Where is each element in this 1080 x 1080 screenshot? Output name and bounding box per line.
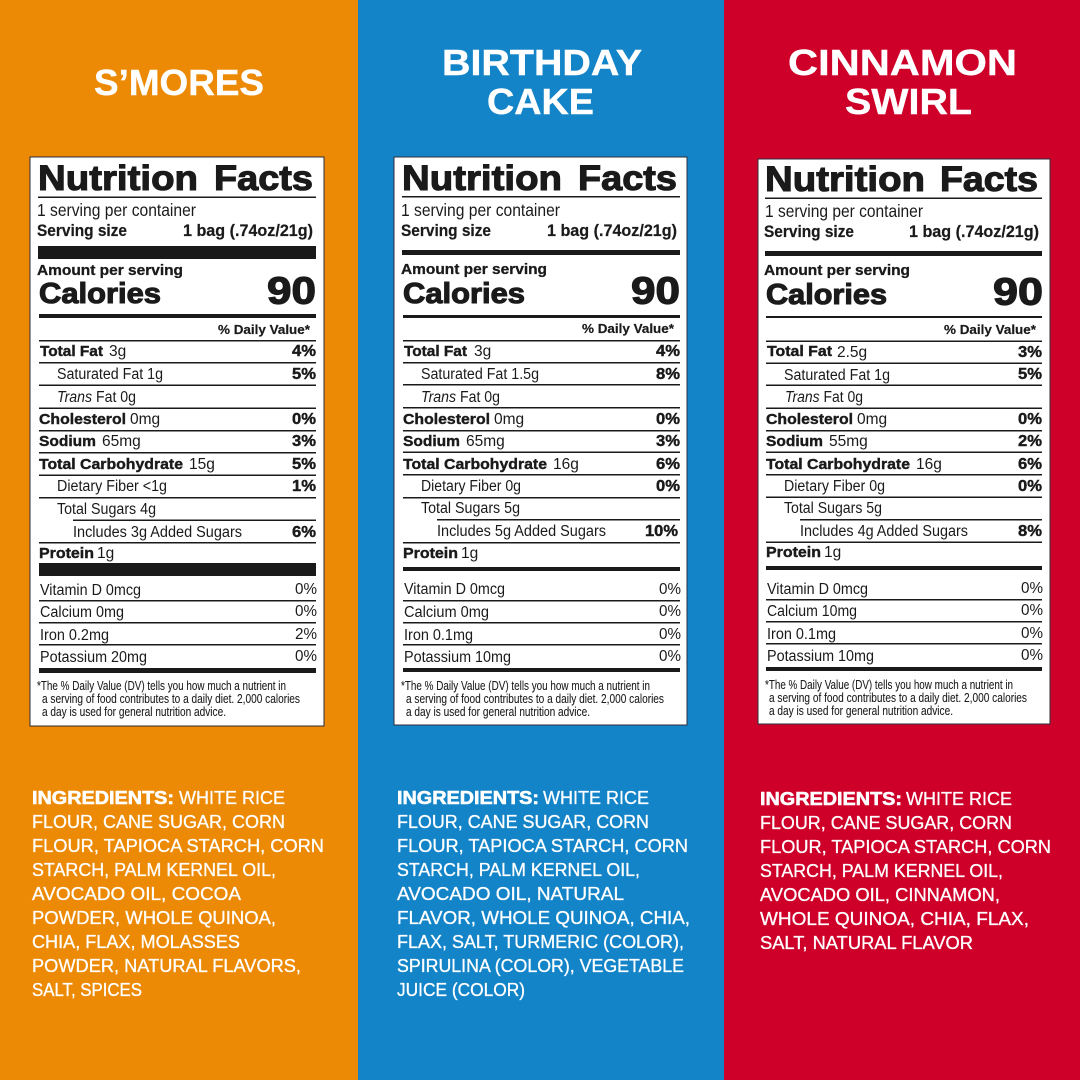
nutrition label: s'mores: Nutrition: [38, 158, 198, 198]
nutrition label: birthday cake: Calories: [403, 278, 525, 310]
nutrition label: cinnamon swirl: 1g: [824, 544, 841, 561]
nutrition label: s'mores: 0%: [295, 603, 317, 620]
nutrition label: cinnamon swirl: Includes 4g Added Sugars: [800, 523, 968, 540]
nutrition label: birthday cake: 4%: [656, 343, 680, 360]
nutrition label: s'mores: 5%: [292, 366, 316, 383]
nutrition label: cinnamon swirl: 8%: [1018, 523, 1042, 540]
nutrition label: cinnamon swirl: 0%: [1021, 580, 1043, 597]
nutrition label: cinnamon swirl: % Daily Value*: [944, 322, 1037, 337]
nutrition label: cinnamon swirl: Total Fat: [767, 343, 832, 360]
nutrition label: birthday cake: Includes 5g Added Sugars: [437, 523, 606, 540]
ingredients: cinnamon swirl: FLOUR, TAPIOCA STARCH, CORN: [760, 836, 1051, 857]
nutrition label: birthday cake: Calcium 0mg: [404, 604, 489, 621]
ingredients: s'mores: POWDER, WHOLE QUINOA,: [32, 907, 276, 928]
nutrition label: s'mores: Saturated Fat 1g: [57, 366, 163, 383]
heading: cinnamon swirl: [788, 42, 1017, 122]
ingredients: s'mores: AVOCADO OIL, COCOA: [32, 883, 242, 904]
ingredients: birthday cake: INGREDIENTS:: [397, 787, 539, 808]
nutrition label: birthday cake: 0%: [656, 411, 680, 428]
nutrition label: cinnamon swirl: Total Carbohydrate: [766, 456, 910, 473]
ingredients: birthday cake: WHITE RICE: [543, 787, 649, 808]
nutrition label: birthday cake: Sodium: [403, 433, 460, 450]
heading: birthday cake: [442, 42, 642, 122]
nutrition label: birthday cake: 1g: [461, 545, 478, 562]
nutrition label: s'mores: Calcium 0mg: [40, 604, 124, 621]
ingredients: birthday cake: FLAVOR, WHOLE QUINOA, CHIA,: [397, 907, 690, 928]
nutrition label: s'mores: Facts: [214, 158, 313, 198]
ingredients: birthday cake: SPIRULINA (COLOR), VEGETABLE: [397, 955, 684, 976]
nutrition label: s'mores: 3g: [109, 343, 126, 360]
nutrition label: s'mores: 6%: [292, 524, 316, 541]
nutrition label: cinnamon swirl: 6%: [1018, 456, 1042, 473]
nutrition label: cinnamon swirl: Nutrition: [765, 159, 925, 199]
nutrition label: cinnamon swirl: 5%: [1018, 366, 1042, 383]
nutrition label: s'mores: 90: [267, 270, 316, 312]
nutrition label: s'mores: [30, 157, 324, 726]
nutrition label: cinnamon swirl: Sodium: [766, 433, 823, 450]
nutrition label: cinnamon swirl: 0mg: [857, 411, 887, 428]
nutrition label: birthday cake: 0%: [659, 603, 681, 620]
ingredients: birthday cake: FLAX, SALT, TURMERIC (COLOR),: [397, 931, 684, 952]
nutrition label: cinnamon swirl: [758, 159, 1050, 724]
nutrition label: birthday cake: Nutrition: [402, 158, 562, 198]
nutrition label: s'mores: 0%: [295, 648, 317, 665]
ingredients: cinnamon swirl: WHITE RICE: [906, 788, 1012, 809]
nutrition label: s'mores: Serving size: [37, 221, 127, 240]
nutrition label: cinnamon swirl: Total Sugars 5g: [784, 500, 882, 517]
ingredients: cinnamon swirl: SALT, NATURAL FLAVOR: [760, 932, 973, 953]
ingredients: s'mores: WHITE RICE: [179, 787, 285, 808]
nutrition label: birthday cake: Protein: [403, 545, 458, 562]
heading: birthday cake: CAKE: [487, 81, 594, 122]
nutrition label: s'mores: 1%: [292, 478, 316, 495]
ingredients: cinnamon swirl: STARCH, PALM KERNEL OIL,: [760, 860, 1003, 881]
nutrition label: s'mores: Total Carbohydrate: [39, 456, 183, 473]
nutrition label: birthday cake: 10%: [645, 523, 678, 540]
nutrition label: birthday cake: Amount per serving: [401, 262, 547, 278]
nutrition label: birthday cake: 6%: [656, 456, 680, 473]
nutrition label: cinnamon swirl: 2.5g: [837, 344, 867, 361]
nutrition label: cinnamon swirl: Amount per serving: [764, 263, 910, 279]
nutrition label: birthday cake: 0%: [659, 581, 681, 598]
ingredients: cinnamon swirl: WHOLE QUINOA, CHIA, FLAX,: [760, 908, 1029, 929]
nutrition label: s'mores: Cholesterol: [39, 411, 126, 428]
nutrition label: birthday cake: Saturated Fat 1.5g: [421, 366, 539, 383]
nutrition label: birthday cake: % Daily Value*: [582, 321, 675, 336]
nutrition label: s'mores: Protein: [39, 545, 94, 562]
nutrition label: s'mores: 65mg: [102, 433, 141, 450]
nutrition label: cinnamon swirl: a day is used for general nutrition advice.: [769, 704, 953, 718]
ingredients: birthday cake: JUICE (COLOR): [397, 979, 525, 1000]
nutrition label: birthday cake: 65mg: [466, 433, 505, 450]
nutrition label: s'mores: 0mg: [130, 411, 160, 428]
ingredients: birthday cake: [397, 787, 690, 1000]
nutrition label: birthday cake: Dietary Fiber 0g: [421, 478, 521, 495]
nutrition label: s'mores: 5%: [292, 456, 316, 473]
nutrition label: cinnamon swirl: Cholesterol: [766, 411, 853, 428]
nutrition label: birthday cake: a serving of food contributes to a daily diet. 2,000 calories: [406, 692, 664, 706]
nutrition label: birthday cake: 1 serving per container: [401, 200, 560, 220]
nutrition label: birthday cake: 90: [631, 270, 680, 312]
nutrition label: s'mores: 15g: [189, 456, 215, 473]
nutrition label: s'mores: Sodium: [39, 433, 96, 450]
ingredients: birthday cake: AVOCADO OIL, NATURAL: [397, 883, 624, 904]
nutrition label: cinnamon swirl: Facts: [940, 159, 1038, 199]
nutrition label: s'mores: Calories: [39, 278, 161, 310]
nutrition label: s'mores: Total Fat: [40, 343, 103, 360]
nutrition label: birthday cake: 0%: [659, 648, 681, 665]
nutrition label: birthday cake: 0%: [656, 478, 680, 495]
heading: birthday cake: BIRTHDAY: [442, 42, 642, 83]
nutrition label: birthday cake: Cholesterol: [403, 411, 490, 428]
nutrition label: s'mores: 1g: [97, 545, 114, 562]
nutrition label: s'mores: Trans Fat 0g: [57, 389, 136, 406]
ingredients: birthday cake: FLOUR, CANE SUGAR, CORN: [397, 811, 649, 832]
nutrition label: s'mores: Iron 0.2mg: [40, 627, 109, 644]
ingredients: s'mores: CHIA, FLAX, MOLASSES: [32, 931, 240, 952]
ingredients: cinnamon swirl: AVOCADO OIL, CINNAMON,: [760, 884, 1000, 905]
nutrition label: s'mores: 4%: [292, 343, 316, 360]
nutrition label: cinnamon swirl: Calories: [766, 279, 887, 311]
ingredients: s'mores: POWDER, NATURAL FLAVORS,: [32, 955, 301, 976]
nutrition label: cinnamon swirl: 90: [993, 272, 1043, 314]
nutrition label: cinnamon swirl: Iron 0.1mg: [767, 626, 836, 643]
nutrition label: cinnamon swirl: Protein: [766, 544, 821, 561]
nutrition label: cinnamon swirl: 55mg: [829, 433, 868, 450]
ingredients: s'mores: INGREDIENTS:: [32, 787, 174, 808]
nutrition label: cinnamon swirl: Serving size: [764, 222, 854, 241]
heading: cinnamon swirl: SWIRL: [845, 81, 972, 122]
nutrition label: s'mores: *The % Daily Value (DV) tells you how much a nutrient in: [37, 679, 286, 693]
nutrition label: cinnamon swirl: Vitamin D 0mcg: [767, 581, 868, 598]
nutrition label: cinnamon swirl: 1 bag (.74oz/21g): [909, 222, 1039, 241]
panel: cinnamon swirl: [724, 0, 1080, 1080]
nutrition label: s'mores: Vitamin D 0mcg: [40, 582, 141, 599]
nutrition label: cinnamon swirl: Trans Fat 0g: [785, 389, 863, 406]
nutrition label: cinnamon swirl: 0%: [1021, 602, 1043, 619]
nutrition label: birthday cake: [394, 157, 687, 725]
nutrition label: s'mores: Dietary Fiber <1g: [57, 478, 167, 495]
nutrition label: cinnamon swirl: 0%: [1018, 411, 1042, 428]
nutrition label: cinnamon swirl: a serving of food contributes to a daily diet. 2,000 calories: [769, 691, 1027, 705]
nutrition label: birthday cake: 3%: [656, 433, 680, 450]
panel: birthday cake: [358, 0, 724, 1080]
nutrition label: cinnamon swirl: Dietary Fiber 0g: [784, 478, 885, 495]
nutrition label: birthday cake: 0mg: [494, 411, 524, 428]
nutrition label: cinnamon swirl: 1 serving per container: [765, 201, 923, 221]
nutrition label: birthday cake: Serving size: [401, 221, 491, 240]
nutrition label: birthday cake: 8%: [656, 366, 680, 383]
nutrition label: cinnamon swirl: 0%: [1021, 647, 1043, 664]
ingredients: s'mores: FLOUR, TAPIOCA STARCH, CORN: [32, 835, 324, 856]
nutrition label: birthday cake: a day is used for general nutrition advice.: [406, 705, 590, 719]
nutrition label: s'mores: 1 serving per container: [37, 200, 196, 220]
nutrition label: s'mores: Potassium 20mg: [40, 649, 147, 666]
nutrition label: s'mores: Includes 3g Added Sugars: [73, 524, 242, 541]
nutrition label: s'mores: a day is used for general nutrition advice.: [42, 705, 226, 719]
nutrition label: cinnamon swirl: 16g: [916, 456, 942, 473]
nutrition label: birthday cake: 16g: [553, 456, 579, 473]
nutrition label: s'mores: a serving of food contributes to a daily diet. 2,000 calories: [42, 692, 300, 706]
nutrition label: cinnamon swirl: Saturated Fat 1g: [784, 367, 890, 384]
nutrition label: birthday cake: Total Carbohydrate: [403, 456, 547, 473]
ingredients: cinnamon swirl: INGREDIENTS:: [760, 788, 902, 809]
nutrition label: birthday cake: Iron 0.1mg: [404, 627, 473, 644]
nutrition label: cinnamon swirl: 0%: [1021, 625, 1043, 642]
nutrition label: birthday cake: 1 bag (.74oz/21g): [547, 221, 677, 240]
nutrition label: s'mores: % Daily Value*: [218, 322, 311, 337]
nutrition label: birthday cake: *The % Daily Value (DV) tells you how much a nutrient in: [401, 679, 650, 693]
ingredients: birthday cake: STARCH, PALM KERNEL OIL,: [397, 859, 640, 880]
nutrition label: cinnamon swirl: 0%: [1018, 478, 1042, 495]
ingredients: s'mores: [32, 787, 324, 1000]
panel: s'mores: [0, 0, 358, 1080]
nutrition label: birthday cake: Vitamin D 0mcg: [404, 581, 505, 598]
nutrition label: cinnamon swirl: 3%: [1018, 344, 1042, 361]
nutrition label: birthday cake: Facts: [578, 158, 677, 198]
nutrition label: birthday cake: Total Sugars 5g: [421, 500, 520, 517]
nutrition label: birthday cake: Total Fat: [404, 343, 467, 360]
nutrition label: cinnamon swirl: Calcium 10mg: [767, 603, 857, 620]
ingredients: cinnamon swirl: [760, 788, 1051, 953]
nutrition label: s'mores: 0%: [292, 411, 316, 428]
nutrition label: cinnamon swirl: 2%: [1018, 433, 1042, 450]
heading: cinnamon swirl: CINNAMON: [788, 42, 1017, 83]
nutrition label: birthday cake: Trans Fat 0g: [421, 389, 500, 406]
nutrition label: s'mores: Total Sugars 4g: [57, 501, 156, 518]
ingredients: birthday cake: FLOUR, TAPIOCA STARCH, CORN: [397, 835, 688, 856]
nutrition label: cinnamon swirl: Potassium 10mg: [767, 648, 874, 665]
nutrition label: birthday cake: Potassium 10mg: [404, 649, 511, 666]
ingredients: s'mores: FLOUR, CANE SUGAR, CORN: [32, 811, 285, 832]
ingredients: s'mores: SALT, SPICES: [32, 979, 142, 1000]
nutrition label: birthday cake: 3g: [474, 343, 491, 360]
nutrition label: s'mores: 3%: [292, 433, 316, 450]
nutrition label: s'mores: 0%: [295, 581, 317, 598]
nutrition label: cinnamon swirl: *The % Daily Value (DV) tells you how much a nutrient in: [765, 678, 1013, 692]
nutrition label: s'mores: 1 bag (.74oz/21g): [183, 221, 313, 240]
heading: s'mores: S’MORES: [94, 62, 264, 103]
nutrition label: birthday cake: 0%: [659, 626, 681, 643]
nutrition label: s'mores: Amount per serving: [37, 263, 183, 279]
nutrition label: s'mores: 2%: [295, 626, 317, 643]
ingredients: s'mores: STARCH, PALM KERNEL OIL,: [32, 859, 276, 880]
ingredients: cinnamon swirl: FLOUR, CANE SUGAR, CORN: [760, 812, 1012, 833]
